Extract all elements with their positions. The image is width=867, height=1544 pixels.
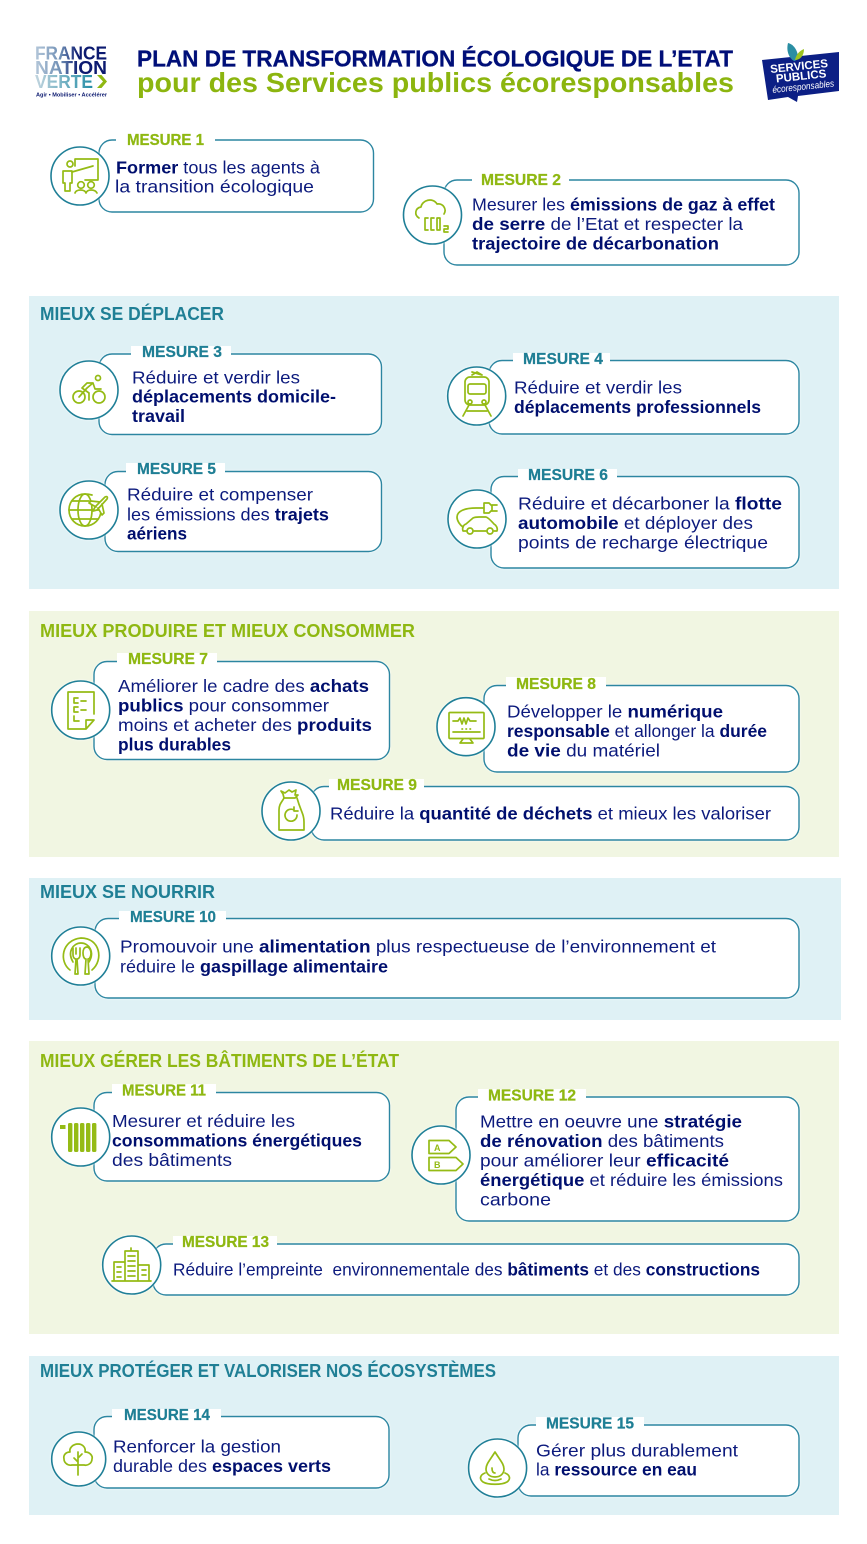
- card: mesure 4: déplacements professionnels: [514, 397, 761, 417]
- card: mesure 8: de vie du matériel: [507, 741, 660, 761]
- card: mesure 8: MESURE 8: [516, 676, 596, 693]
- card: mesure 10: [52, 909, 799, 998]
- card: mesure 14: durable des espaces verts: [113, 1456, 331, 1476]
- logo: Services publics écoresponsables: écoresponsables: [772, 78, 835, 96]
- panel: mesure 2: [404, 172, 799, 265]
- logo: France Nation Verte: Agir • Mobiliser • Accélérer: [36, 92, 108, 98]
- icon: plate and cutlery: [63, 938, 99, 974]
- icon: CO2 cloud: [416, 200, 448, 232]
- panel: mesure 1: Former tous les agents à: [116, 158, 320, 178]
- card: mesure 12: pour améliorer leur efficacité: [480, 1151, 729, 1171]
- icon: recycling bag: [279, 790, 304, 830]
- icon: train: [463, 372, 491, 416]
- panel: mieux se déplacer: [29, 296, 839, 589]
- heading: mieux se nourrir: MIEUX SE NOURRIR: [40, 882, 215, 902]
- card: mesure 9: [262, 777, 799, 840]
- logo: Services publics écoresponsables: SERVICES: [770, 58, 829, 76]
- card: mesure 5: MESURE 5: [137, 461, 216, 478]
- card: mesure 7: MESURE 7: [128, 651, 208, 668]
- card: mesure 15: [469, 1416, 799, 1497]
- card: mesure 15: MESURE 15: [546, 1416, 634, 1433]
- icon: monitor: [449, 712, 484, 743]
- title: pour des Services publics écoresponsables: [137, 67, 734, 98]
- card: mesure 6: Réduire et décarboner la flotte: [518, 494, 782, 514]
- icon: energy labels: B: [434, 1160, 441, 1170]
- card: mesure 3: [60, 344, 382, 434]
- heading: mieux se déplacer: MIEUX SE DÉPLACER: [40, 303, 224, 324]
- title: PLAN DE TRANSFORMATION ÉCOLOGIQUE DE L’ETAT: [137, 44, 733, 72]
- card: mesure 7: [52, 651, 389, 760]
- card: mesure 4: MESURE 4: [523, 351, 603, 368]
- heading: mieux gérer les bâtiments: MIEUX GÉRER LES BÂTIMENTS DE L’ÉTAT: [40, 1050, 399, 1071]
- card: mesure 12: Mettre en oeuvre une stratégie: [480, 1112, 742, 1132]
- card: mesure 10: Promouvoir une alimentation plus respectueuse de l’environnement et: [120, 937, 716, 957]
- logo: France Nation Verte: FRANCE: [35, 44, 107, 64]
- icon: teacher and audience: [63, 159, 98, 193]
- panel: mesure 1: [51, 132, 374, 212]
- card: mesure 5: Réduire et compenser: [127, 485, 313, 505]
- panel: mesure 1: la transition écologique: [115, 177, 314, 197]
- card: mesure 14: Renforcer la gestion: [113, 1437, 281, 1457]
- card: mesure 7: plus durables: [118, 735, 231, 755]
- panel: mesure 2: MESURE 2: [481, 172, 561, 189]
- card: mesure 11: consommations énergétiques: [112, 1131, 362, 1151]
- card: mesure 6: automobile et déployer des: [518, 513, 753, 533]
- card: mesure 9: MESURE 9: [337, 777, 417, 794]
- panel: mieux protéger et valoriser nos écosystèmes: [29, 1356, 839, 1515]
- card: mesure 3: travail: [132, 406, 185, 426]
- card: mesure 6: MESURE 6: [528, 467, 608, 484]
- panel: mieux gérer les bâtiments de l'état: [29, 1041, 839, 1334]
- icon: energy labels: [429, 1140, 463, 1170]
- panel: mieux produire et mieux consommer: [29, 611, 839, 857]
- card: mesure 15: la ressource en eau: [536, 1460, 697, 1480]
- card: mesure 8: responsable et allonger la durée: [507, 721, 767, 741]
- card: mesure 12: [412, 1088, 799, 1221]
- card: mesure 14: [52, 1407, 389, 1488]
- icon: radiator: [60, 1123, 96, 1152]
- card: mesure 7: moins et acheter des produits: [118, 715, 372, 735]
- panel: mesure 2: trajectoire de décarbonation: [472, 234, 719, 254]
- card: mesure 13: [103, 1234, 799, 1295]
- card: mesure 10: réduire le gaspillage alimentaire: [120, 957, 388, 977]
- panel: mesure 2: de serre de l’Etat et respecter la: [472, 214, 743, 234]
- card: mesure 3: MESURE 3: [142, 344, 222, 361]
- card: mesure 15: Gérer plus durablement: [536, 1441, 738, 1461]
- card: mesure 8: [437, 676, 799, 772]
- card: mesure 13: Réduire l’empreinte environnementale des bâtiments et des constructions: [173, 1260, 760, 1280]
- heading: mieux produire et mieux consommer: MIEUX PRODUIRE ET MIEUX CONSOMMER: [40, 621, 415, 641]
- panel: mieux se nourrir: [29, 878, 841, 1020]
- card: mesure 14: MESURE 14: [124, 1407, 210, 1424]
- card: mesure 6: [448, 467, 799, 568]
- icon: cyclist: [73, 376, 105, 403]
- icon: energy labels: A: [434, 1143, 441, 1153]
- card: mesure 9: Réduire la quantité de déchets et mieux les valoriser: [330, 804, 771, 824]
- card: mesure 7: publics pour consommer: [118, 696, 329, 716]
- card: mesure 3: Réduire et verdir les: [132, 368, 300, 388]
- panel: mesure 1: MESURE 1: [127, 132, 204, 149]
- icon: buildings: [112, 1248, 151, 1281]
- icon: globe and plane: [69, 494, 107, 526]
- card: mesure 4: [448, 351, 799, 434]
- heading: mieux protéger: MIEUX PROTÉGER ET VALORISER NOS ÉCOSYSTÈMES: [40, 1360, 496, 1381]
- card: mesure 11: [52, 1083, 389, 1181]
- card: mesure 11: des bâtiments: [112, 1150, 232, 1170]
- icon: tree: [64, 1444, 92, 1475]
- card: mesure 5: [60, 461, 382, 552]
- icon: water drop: [481, 1452, 509, 1484]
- card: mesure 12: MESURE 12: [488, 1088, 576, 1105]
- panel: mesure 2: Mesurer les émissions de gaz à effet: [472, 195, 775, 215]
- card: mesure 3: déplacements domicile-: [132, 387, 336, 407]
- card: mesure 10: MESURE 10: [130, 909, 216, 926]
- card: mesure 12: carbone: [480, 1190, 551, 1210]
- icon: checklist document: [68, 692, 94, 729]
- card: mesure 7: Améliorer le cadre des achats: [118, 676, 369, 696]
- icon: electric car and plug: [457, 503, 497, 534]
- card: mesure 12: énergétique et réduire les émissions: [480, 1170, 783, 1190]
- card: mesure 12: de rénovation des bâtiments: [480, 1131, 724, 1151]
- title: [137, 44, 734, 98]
- card: mesure 11: MESURE 11: [122, 1083, 206, 1100]
- logo: Services publics écoresponsables: PUBLICS: [775, 68, 827, 85]
- card: mesure 11: Mesurer et réduire les: [112, 1111, 295, 1131]
- card: mesure 4: Réduire et verdir les: [514, 378, 682, 398]
- card: mesure 13: MESURE 13: [182, 1234, 269, 1251]
- card: mesure 5: aériens: [127, 524, 187, 544]
- logo: France Nation Verte: NATION: [35, 58, 107, 78]
- card: mesure 6: points de recharge électrique: [518, 533, 768, 553]
- logo: Services publics écoresponsables: [762, 43, 839, 102]
- card: mesure 5: les émissions des trajets: [127, 505, 329, 525]
- logo: France Nation Verte: [35, 44, 108, 98]
- card: mesure 8: Développer le numérique: [507, 702, 723, 722]
- logo: France Nation Verte: VERTE: [35, 72, 93, 92]
